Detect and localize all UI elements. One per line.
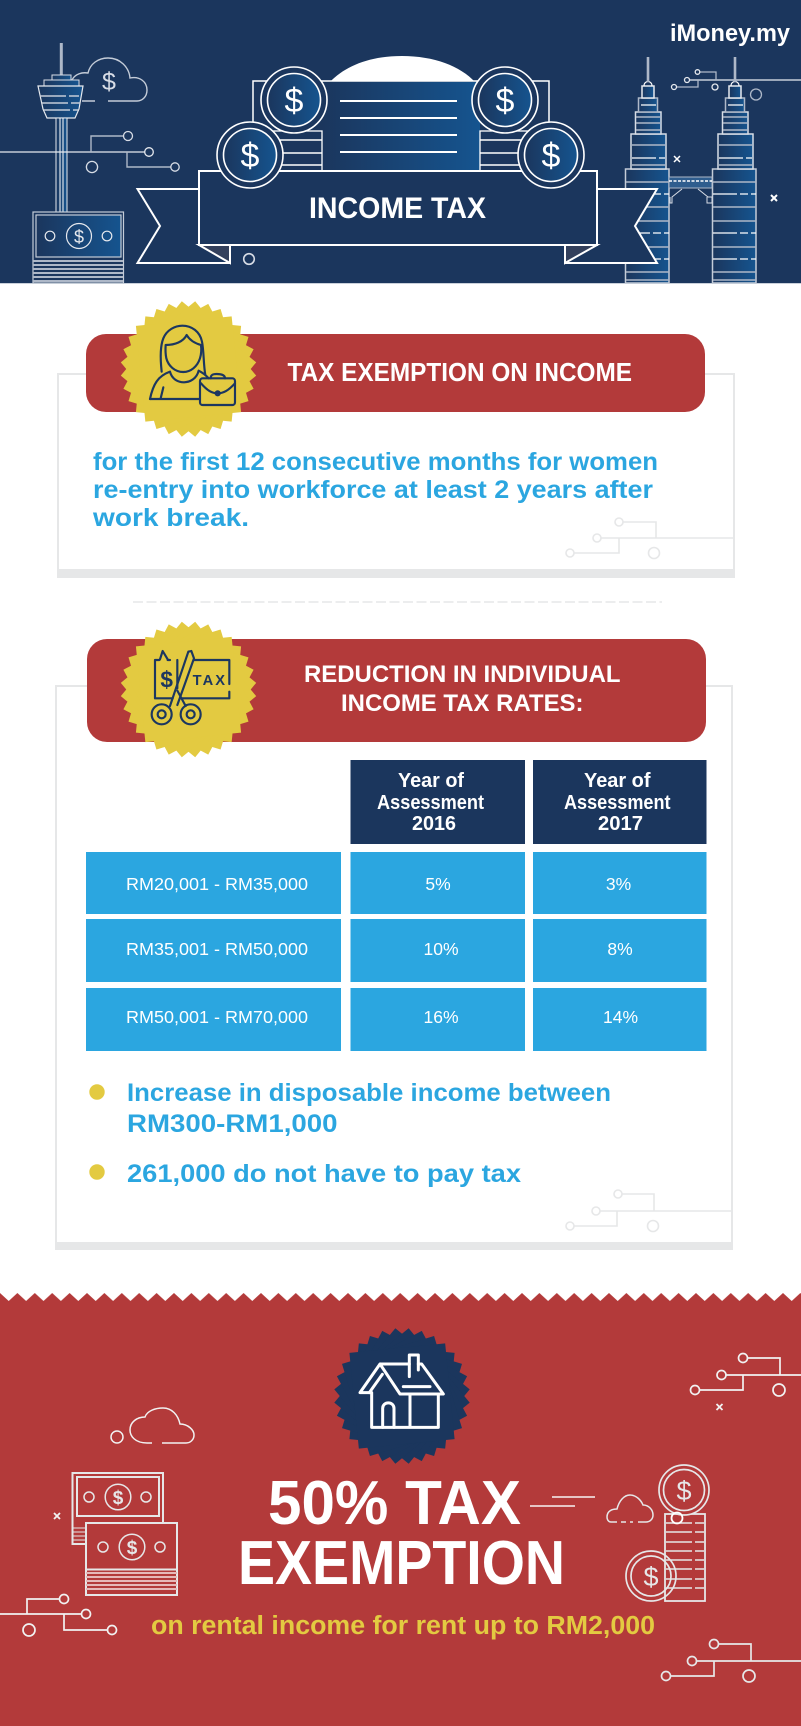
circuit watermark [566, 518, 734, 558]
row 3 [86, 988, 706, 1051]
row 2: 10% [423, 939, 459, 959]
ribbon banner [199, 171, 597, 245]
bullet list [89, 1079, 611, 1188]
icon: banknotes [72, 1473, 177, 1595]
column header 2016: Year of [398, 770, 464, 792]
icon: banknote stack [33, 212, 124, 283]
icon: KL tower [38, 43, 83, 212]
ribbon tails [138, 189, 657, 263]
badge [334, 1328, 470, 1464]
table: tax rates [86, 760, 706, 1051]
icon: coin stacks [266, 131, 532, 171]
logo: iMoney.my [670, 20, 791, 47]
icon: coin upper: $ [676, 1476, 692, 1506]
heading: TAX EXEMPTION ON INCOME [288, 357, 632, 387]
row 2: 8% [607, 939, 633, 959]
column header 2016: Assessment [377, 792, 484, 814]
heading [304, 661, 621, 717]
icon: coin bottom left: $ [241, 137, 260, 175]
headline [238, 1469, 565, 1598]
icon: small circle [244, 254, 254, 264]
heading bar [86, 334, 705, 412]
badge [121, 622, 256, 757]
row 3: 16% [423, 1007, 459, 1027]
icon: scissors cutting tax: TAX [193, 673, 225, 689]
row 3: 14% [603, 1007, 638, 1027]
icon: circuit lower left [0, 1594, 116, 1636]
body text: work break. [92, 504, 249, 532]
icon: house [360, 1355, 443, 1427]
body text: re-entry into workforce at least 2 years after [93, 476, 653, 504]
column header 2017: Assessment [564, 792, 671, 814]
icon: cloud with dollar: $ [102, 68, 116, 96]
row 2: RM35,001 - RM50,000 [126, 939, 308, 959]
icon: twin towers [626, 57, 756, 283]
icon: circuit left [0, 132, 179, 173]
panel: reduction in tax rates [56, 622, 733, 1250]
icon: x mark [54, 1513, 60, 1519]
title: INCOME TAX [309, 192, 486, 225]
icon: small cloud [607, 1495, 653, 1522]
icon: small circle [672, 1512, 682, 1524]
circuit watermark [566, 1190, 731, 1232]
icon: coin stack [665, 1514, 705, 1601]
bullet list: RM300-RM1,000 [127, 1110, 338, 1138]
icon: coin top left [261, 67, 327, 133]
badge [121, 301, 256, 437]
icon: businesswoman [150, 326, 235, 405]
row 1 [86, 852, 706, 914]
bullet list: Increase in disposable income between [127, 1079, 611, 1107]
icon: coin bottom right [518, 122, 584, 188]
subheading: on rental income for rent up to RM2,000 [151, 1612, 655, 1640]
icon: coin upper [659, 1465, 709, 1515]
icon: banknotes: $ [113, 1488, 124, 1509]
headline: EXEMPTION [238, 1529, 565, 1598]
icon: cloud with dollar [72, 58, 147, 101]
column header 2017 [533, 760, 706, 844]
icon: coin top right: $ [496, 82, 515, 120]
icon: banknotes: $ [127, 1538, 138, 1559]
body text: for the first 12 consecutive months for women [93, 448, 658, 476]
header banner [0, 0, 801, 284]
icon: scissors cutting tax: $ [160, 666, 173, 692]
divider [133, 601, 662, 603]
heading: INCOME TAX RATES: [341, 690, 584, 717]
icon: circuit top right [690, 1354, 801, 1396]
panel: rental income exemption [0, 1293, 801, 1726]
icon: x mark [716, 1404, 722, 1410]
icon: circuit lower right [662, 1640, 801, 1682]
icon: coin bottom left [217, 122, 283, 188]
column header 2016 [350, 760, 525, 844]
icon: coin top right [472, 67, 538, 133]
icon: coin lower [626, 1551, 676, 1601]
row 2 [86, 919, 706, 982]
icon: cloud left [111, 1408, 194, 1443]
icon: banknote stack: $ [74, 227, 84, 247]
icon: tax document [253, 56, 549, 171]
heading bar [87, 639, 706, 742]
column header 2016: 2016 [412, 813, 456, 835]
icon: coin bottom right: $ [542, 137, 561, 175]
column header 2017: Year of [584, 770, 651, 792]
column header 2017: 2017 [598, 813, 643, 835]
icon: coin top left: $ [285, 82, 304, 120]
bullet list: 261,000 do not have to pay tax [127, 1160, 521, 1188]
row 1: 5% [425, 874, 451, 894]
icon: circuit right [672, 70, 801, 100]
decorative speed lines [530, 1497, 595, 1506]
row 1: RM20,001 - RM35,000 [126, 874, 308, 894]
row 3: RM50,001 - RM70,000 [126, 1007, 308, 1027]
icon: coin lower: $ [643, 1562, 659, 1592]
row 1: 3% [606, 874, 631, 894]
icon: scissors cutting tax [152, 651, 229, 724]
heading: REDUCTION IN INDIVIDUAL [304, 661, 621, 688]
headline: 50% TAX [268, 1469, 521, 1538]
icon: x marks [674, 156, 777, 201]
body text [92, 448, 658, 532]
panel: tax exemption on income [58, 301, 735, 577]
